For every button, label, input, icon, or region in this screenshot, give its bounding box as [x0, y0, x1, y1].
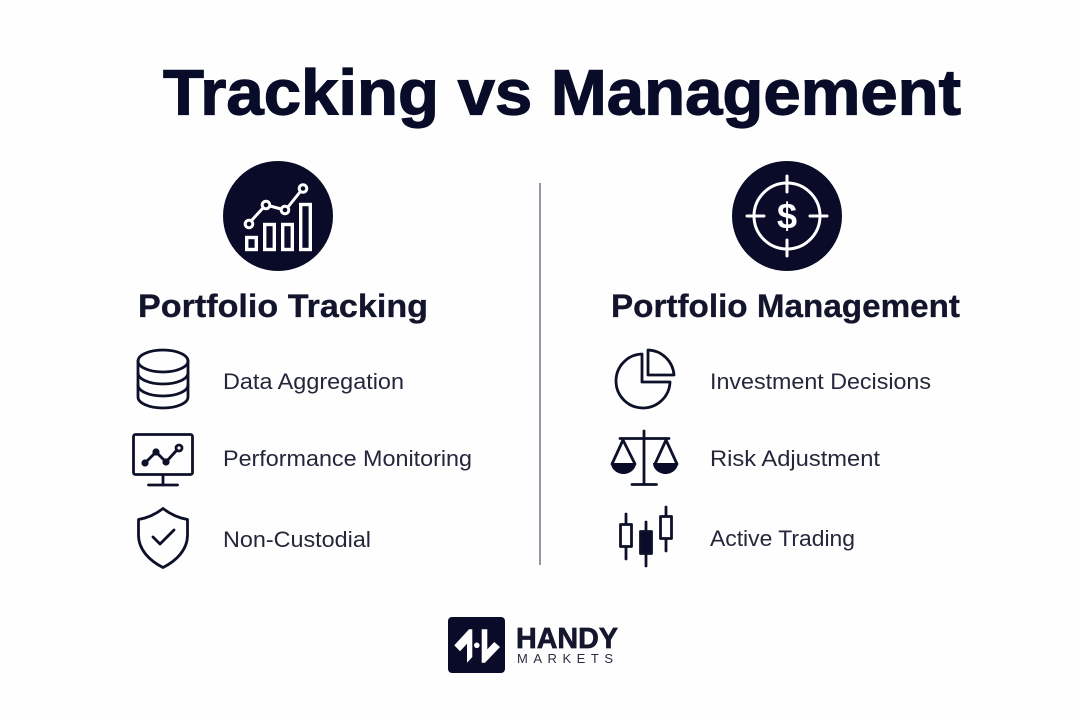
text: risk adjustment: Risk Adjustment [710, 446, 880, 471]
icon: database [138, 350, 188, 408]
logo mark [448, 617, 505, 673]
icon: pie chart [616, 350, 674, 408]
icon: candlesticks [620, 507, 672, 566]
text: non-custodial: Non-Custodial [223, 527, 371, 552]
icon: shield with check [138, 508, 188, 568]
panel: portfolio management [611, 161, 960, 566]
text: investment decisions: Investment Decisions [710, 369, 931, 394]
logo tagline: MARKETS [517, 651, 613, 666]
title: Tracking vs Management [163, 56, 961, 128]
text: data aggregation: Data Aggregation [223, 369, 404, 394]
panel: portfolio tracking [134, 161, 472, 568]
icon: bar chart with trend line [223, 161, 333, 271]
heading: portfolio management: Portfolio Management [611, 288, 960, 324]
icon: dollar target [732, 161, 842, 271]
text: performance monitoring: Performance Monitoring [223, 446, 472, 471]
center divider [539, 183, 541, 565]
icon: balance scale [611, 431, 678, 484]
icon: performance monitor [134, 434, 192, 485]
logo: handy markets [448, 617, 618, 673]
text: active trading: Active Trading [710, 526, 855, 551]
icon: dollar target: $ [777, 196, 797, 236]
logo wordmark: HANDY [516, 623, 618, 655]
heading: portfolio tracking: Portfolio Tracking [138, 288, 428, 324]
